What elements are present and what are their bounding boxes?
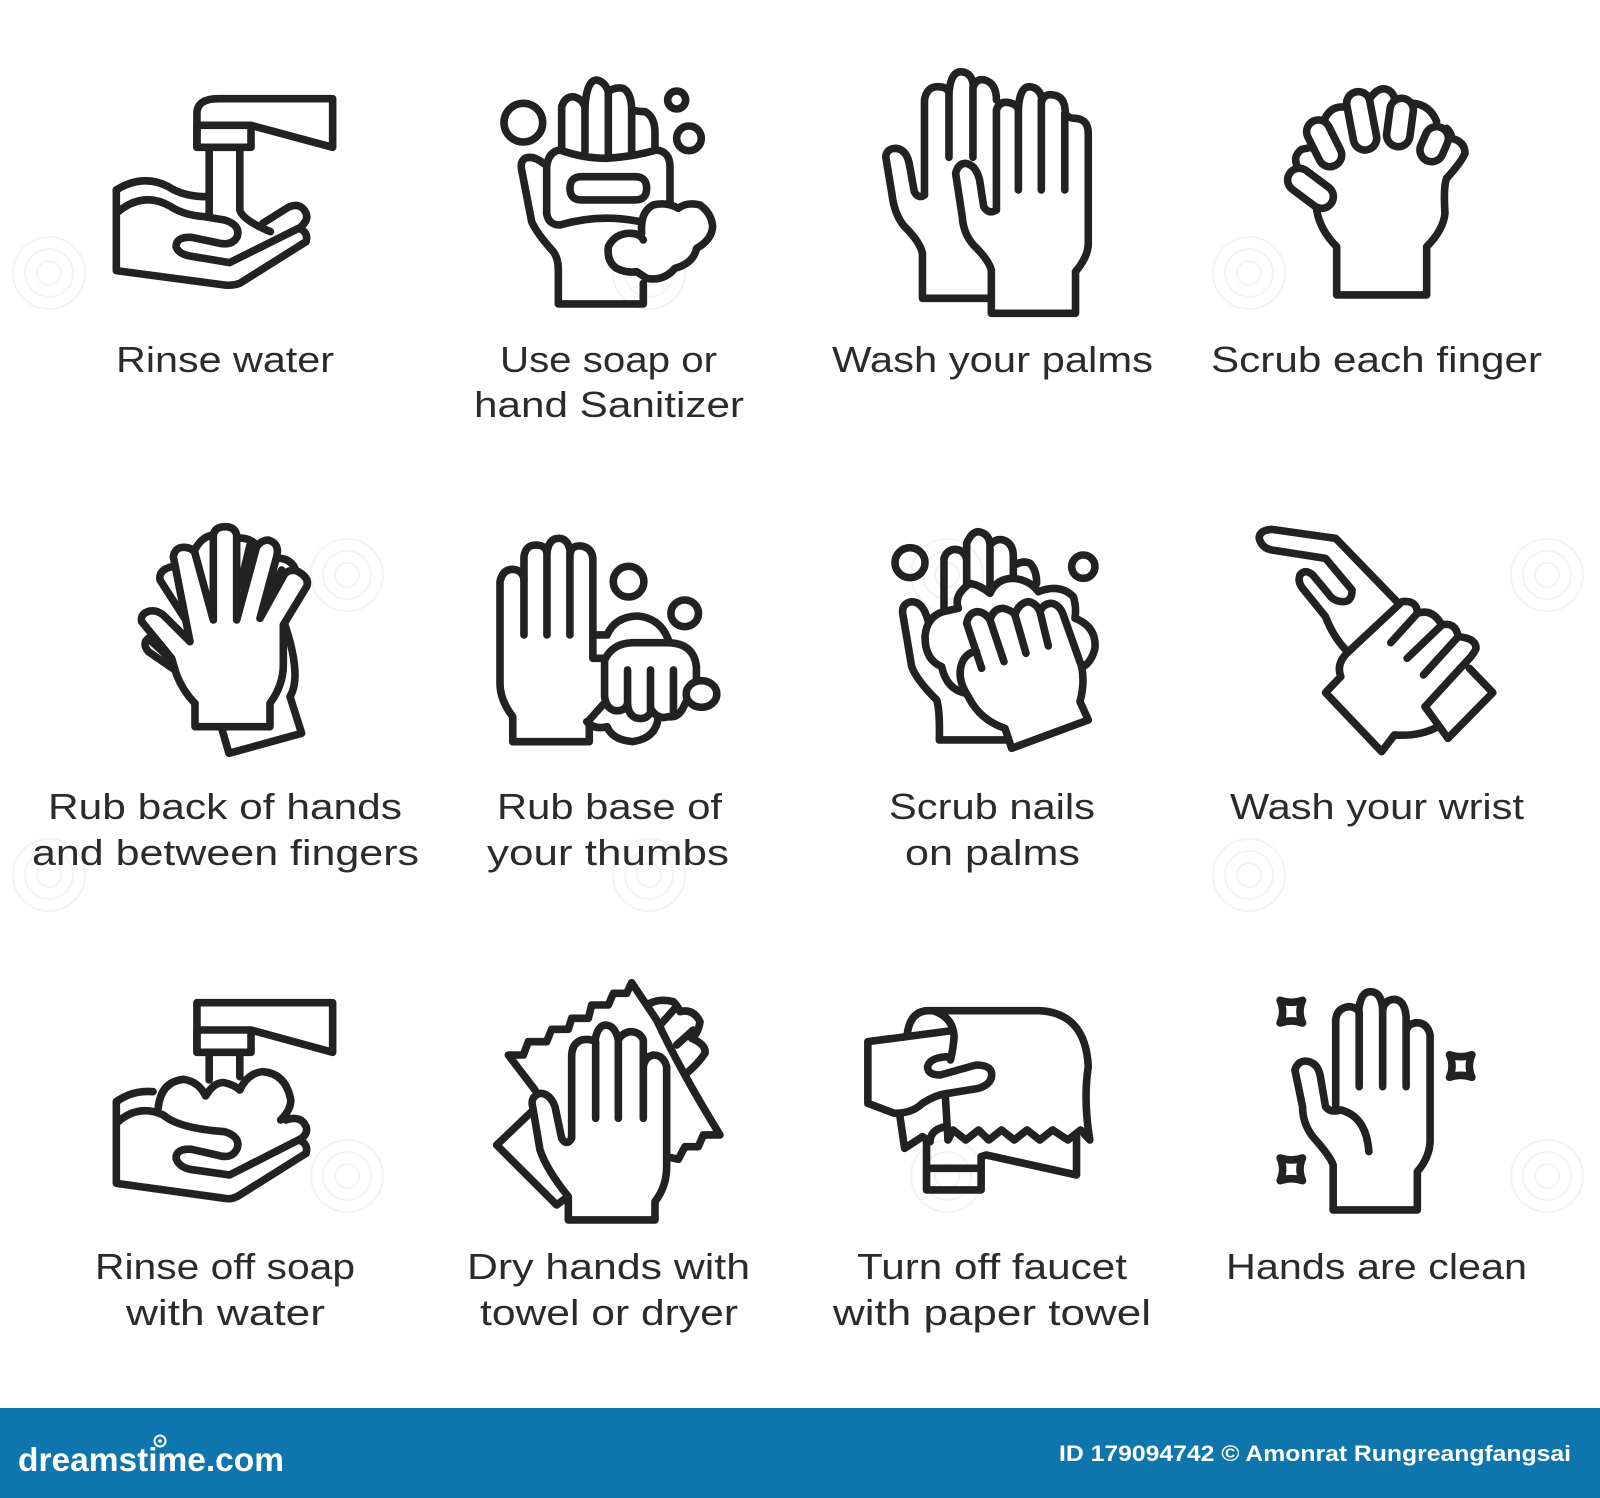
label: with water [125, 1292, 325, 1333]
label: Rub base of [497, 786, 723, 827]
panel: hands are clean [1226, 992, 1527, 1287]
label: Use soap or [500, 339, 717, 380]
label [32, 786, 419, 873]
icon: hand gripping thumb with foam [500, 538, 717, 742]
panel: scrub nails [889, 532, 1095, 873]
label: on palms [905, 832, 1080, 873]
panel: dry hands [467, 983, 750, 1333]
icon: foamy hand under faucet [116, 1003, 333, 1199]
label [889, 786, 1095, 873]
footer banner [0, 1408, 1600, 1498]
label: Rinse water [116, 339, 334, 380]
label: Turn off faucet [857, 1246, 1127, 1287]
label: Rub back of hands [48, 786, 402, 827]
label: and between fingers [32, 832, 419, 873]
label [487, 786, 729, 873]
label [95, 1246, 355, 1333]
label: towel or dryer [480, 1292, 738, 1333]
panel: turn off faucet [832, 1011, 1151, 1333]
icon: hand over hand with spread fingers [141, 527, 307, 753]
label: Scrub nails [889, 786, 1095, 827]
icon: hand gripping wrist [1259, 529, 1493, 752]
label: with paper towel [832, 1292, 1151, 1333]
icon: two overlapping open hands [886, 72, 1088, 313]
label [832, 1246, 1151, 1333]
panel: rinse off soap [95, 1003, 355, 1333]
icon: hand holding soap bar with foam [504, 80, 713, 304]
image credit: ID 179094742 © Amonrat Rungreangfangsai [1059, 1441, 1571, 1466]
panel: use soap [474, 80, 744, 425]
label [467, 1246, 750, 1333]
panel: scrub each finger [1211, 89, 1542, 380]
label [474, 339, 744, 425]
icon: hand with paper towel [497, 983, 720, 1220]
label: Dry hands with [467, 1246, 750, 1287]
label: Rinse off soap [95, 1246, 355, 1287]
panel: rub base of thumbs [487, 538, 729, 873]
icon: hand with paper towel on faucet [868, 1011, 1090, 1190]
panel: wash palms [832, 72, 1153, 380]
icon: clean hand with sparkles [1280, 992, 1472, 1210]
label: your thumbs [487, 832, 729, 873]
panel: wash wrist [1230, 529, 1524, 827]
logo: dreamstime.com: dreamstime.com [18, 1441, 284, 1478]
label: Wash your palms [832, 339, 1153, 380]
panel: rinse water [116, 99, 334, 380]
icon: clasped fist with fingers [1296, 89, 1465, 295]
icon: hand under running faucet [116, 99, 333, 285]
label: Hands are clean [1226, 1246, 1527, 1287]
icon: fingertips scrubbing palm in foam [895, 532, 1095, 748]
label: Wash your wrist [1230, 786, 1524, 827]
panel: rub back of hands [32, 527, 419, 873]
label: Scrub each finger [1211, 339, 1542, 380]
label: hand Sanitizer [474, 384, 744, 425]
